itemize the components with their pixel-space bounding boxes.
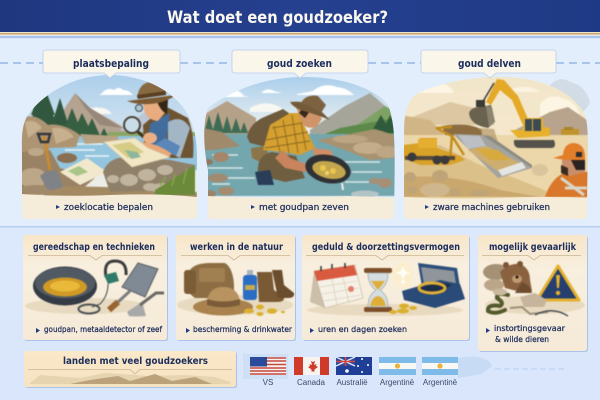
excavator — [469, 79, 579, 148]
icon: trowel — [127, 293, 164, 316]
card: werken in de natuur: bescherming & drinkwater — [193, 325, 293, 334]
panel: goud zoeken scene: met goudpan zeven — [259, 203, 349, 213]
flag: Canada — [294, 357, 329, 387]
card: werken in de natuur: werken in de natuur — [190, 242, 283, 253]
flag: Australië — [336, 357, 372, 387]
icon: boots — [257, 270, 294, 302]
label: plaatsbepaling: plaatsbepaling — [73, 57, 149, 70]
card: mogelijk gevaarlijk — [478, 235, 588, 352]
card: gereedschap en technieken: goudpan, metaaldetector of zeef — [44, 325, 162, 334]
panel: plaatsbepaling scene: zoeklocatie bepalen — [64, 203, 153, 213]
flag: Argentinë — [379, 357, 416, 387]
man panning — [247, 96, 335, 185]
man with magnifier — [124, 82, 193, 158]
card: mogelijk gevaarlijk: instortingsgevaar — [494, 324, 566, 333]
sluice — [453, 134, 532, 178]
icon: gold nuggets — [244, 304, 285, 316]
caption card — [22, 194, 197, 219]
card: geduld en doorzettingsvermogen: uren en dagen zoeken — [318, 325, 407, 334]
icon: rocks — [493, 288, 547, 307]
card: gereedschap en technieken: gereedschap en technieken — [33, 242, 155, 253]
panel: goud zoeken scene — [200, 75, 400, 219]
icon: snake — [488, 294, 508, 313]
label: goud delven: goud delven — [458, 57, 521, 70]
flag: Canada: Canada — [297, 378, 326, 387]
truck and conveyor — [403, 127, 465, 165]
icon: metal detector — [78, 261, 126, 314]
card: gereedschap en technieken — [23, 235, 168, 341]
icon: jewellery box — [402, 263, 465, 308]
panel: plaatsbepaling scene — [22, 75, 197, 219]
icon: warning triangle — [537, 266, 579, 300]
label: goud zoeken — [232, 50, 368, 78]
icon: bear — [483, 261, 532, 293]
icon: gold pan — [33, 266, 97, 306]
icon: pickaxe — [510, 307, 568, 316]
flag: VS — [243, 354, 288, 387]
card: geduld en doorzettingsvermogen — [302, 235, 470, 341]
title: Wat doet een goudzoeker? — [167, 8, 388, 28]
label: plaatsbepaling — [43, 50, 180, 78]
card: mogelijk gevaarlijk: & wilde dieren — [495, 335, 549, 344]
panel: goud delven scene — [400, 72, 595, 219]
card: werken in de natuur — [176, 235, 296, 341]
label: goud zoeken: goud zoeken — [267, 57, 332, 70]
flag: Argentinë — [422, 357, 458, 387]
worker with helmet — [545, 143, 588, 197]
icon: calendar — [310, 263, 363, 308]
icon: water bottle — [243, 270, 257, 300]
icon: hat — [193, 287, 253, 316]
gold pan — [304, 154, 352, 191]
card: landen met veel goudzoekers: landen met veel goudzoekers — [63, 356, 208, 367]
icon: hourglass — [364, 268, 392, 312]
card: mogelijk gevaarlijk: mogelijk gevaarlijk — [489, 242, 577, 253]
flag: VS: VS — [263, 378, 273, 387]
flag: Argentinë: Argentinë — [423, 378, 458, 387]
icon: backpack — [184, 263, 234, 298]
flag: Argentinë: Argentinë — [380, 378, 415, 387]
icon: sieve — [109, 263, 158, 310]
label: goud delven — [421, 50, 556, 78]
card: geduld en doorzettingsvermogen: geduld & doorzettingsvermogen — [312, 242, 460, 253]
card: landen met veel goudzoekers — [24, 351, 237, 388]
flag: Australië: Australië — [336, 378, 368, 387]
panel: goud delven scene: zware machines gebruiken — [433, 203, 550, 213]
header banner — [0, 0, 600, 38]
shovel — [38, 134, 63, 190]
large map — [104, 138, 170, 167]
flags row — [243, 354, 565, 387]
icon: gold pile — [389, 304, 417, 314]
icon: sparkles — [393, 262, 413, 288]
